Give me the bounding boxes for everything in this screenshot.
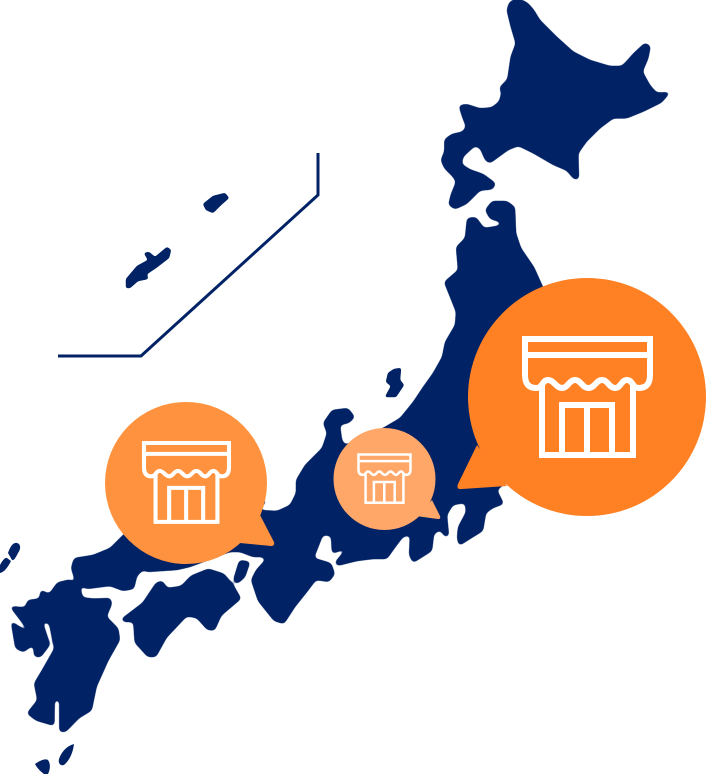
bubble: small store marker: [334, 428, 440, 530]
islands: Tanegashima and Yakushima: [35, 744, 74, 774]
island: Tsushima: [126, 247, 171, 288]
island: Awaji: [233, 560, 250, 584]
icon: storefront large: [525, 339, 650, 455]
island: Shikoku: [121, 569, 241, 657]
bubble: medium store marker: [105, 402, 274, 564]
island: Hokkaido: [441, 0, 671, 209]
island: Kyushu: [9, 579, 120, 732]
small northern and western islands: [126, 193, 404, 397]
island: Honshu: [71, 201, 570, 624]
islands: Goto: [0, 543, 20, 573]
icon: storefront small: [358, 454, 410, 503]
icon: storefront medium: [144, 443, 229, 522]
inset boundary line: [58, 153, 318, 356]
bubble: large store marker: [458, 278, 706, 516]
island: Oki: [203, 193, 229, 213]
island: Sado: [385, 368, 404, 397]
